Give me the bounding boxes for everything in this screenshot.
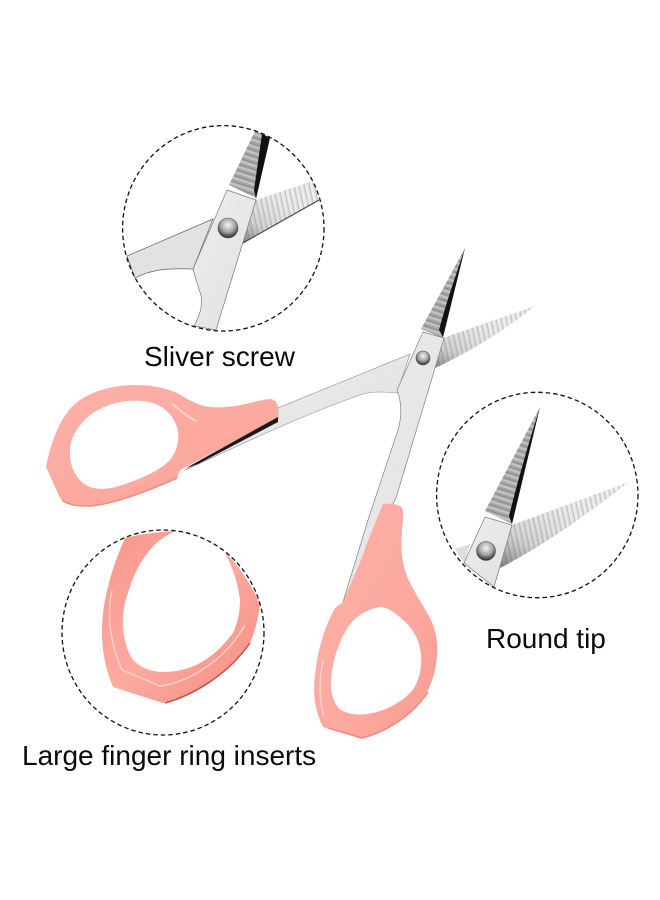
left arm steel [185,354,410,470]
screw detail [476,542,496,560]
ring dark edge [165,643,250,703]
blade dark edge [509,407,540,524]
label: large finger ring inserts: Large finger ring inserts [22,740,316,771]
handle lower edge shading [328,692,428,738]
blade dark edge [254,134,270,199]
arm stub detail [455,544,470,563]
main scissors [46,248,535,738]
handle lower edge shading [62,478,177,506]
upper blade [421,248,465,338]
dashed ring [437,392,638,598]
pink ring detail [102,531,260,703]
zoom circle: large finger ring inserts [62,530,264,735]
pivot plate and long shank [343,332,444,602]
handle highlight [320,660,324,716]
label: sliver screw: Sliver screw [144,341,296,372]
handle shadow sliver [186,417,278,468]
zoom circle: round tip [437,392,638,598]
pivot plate detail [464,517,512,587]
dashed ring [123,126,324,331]
label: round tip: Round tip [486,623,606,654]
pivot plate detail [193,190,256,330]
right blade detail [243,181,319,243]
pivot screw [416,351,430,365]
screw detail [218,218,238,238]
left arm detail [127,219,213,278]
right blade detail [500,482,629,568]
handle highlight [172,404,196,421]
ring highlight [109,590,245,686]
upper blade detail [485,407,540,524]
lower blade [433,306,535,369]
lower pink handle [314,504,437,738]
left pink handle [46,385,278,506]
upper blade dark edge [439,248,465,337]
dashed ring [62,530,264,735]
upper blade detail [229,131,267,198]
zoom circle: sliver screw [123,126,324,331]
